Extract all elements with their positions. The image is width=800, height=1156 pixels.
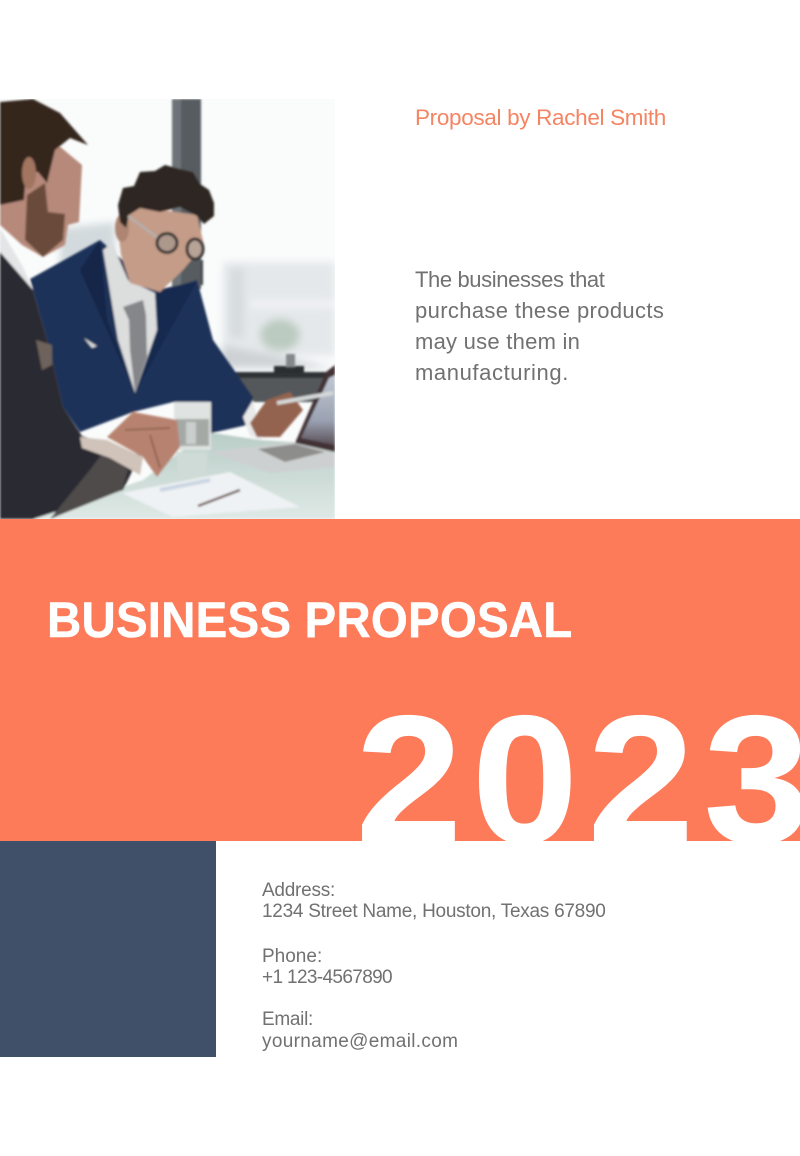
address: Address: <box>262 880 335 901</box>
blue man jacket <box>30 240 253 434</box>
shirt and tie <box>103 243 157 393</box>
blue man cuff, hand and pen <box>243 400 262 440</box>
email: Email: <box>262 1009 313 1030</box>
left man suit <box>0 250 140 519</box>
address <box>262 880 606 922</box>
intro paragraph: manufacturing. <box>415 360 569 385</box>
left man shirt cuff <box>80 437 143 475</box>
intro paragraph <box>415 267 664 385</box>
phone: Phone: <box>262 946 322 967</box>
heading: business proposal: BUSINESS PROPOSAL <box>47 591 572 648</box>
paper documents <box>122 472 300 517</box>
glasses <box>128 216 158 238</box>
proposal author line: Proposal by Rachel Smith <box>415 105 666 130</box>
photo: two businessmen at a table <box>0 99 335 519</box>
phone: +1 123-4567890 <box>262 967 392 988</box>
window frame <box>172 99 201 289</box>
email <box>262 1009 458 1052</box>
blue man curly hair <box>118 165 214 228</box>
panel: orange title band <box>0 519 800 841</box>
left man face <box>0 130 82 257</box>
navy block <box>0 841 216 1057</box>
email: yourname@email.com <box>262 1031 458 1052</box>
water glass <box>174 402 211 450</box>
laptop <box>210 442 335 473</box>
contact details <box>262 880 606 1052</box>
intro paragraph: The businesses that <box>415 267 604 292</box>
intro paragraph: purchase these products <box>415 298 664 323</box>
blue man face and neck <box>117 205 204 292</box>
intro paragraph: may use them in <box>415 329 580 354</box>
address: 1234 Street Name, Houston, Texas 67890 <box>262 901 606 922</box>
phone <box>262 946 392 988</box>
clasped hands <box>107 412 180 477</box>
table <box>30 432 335 519</box>
